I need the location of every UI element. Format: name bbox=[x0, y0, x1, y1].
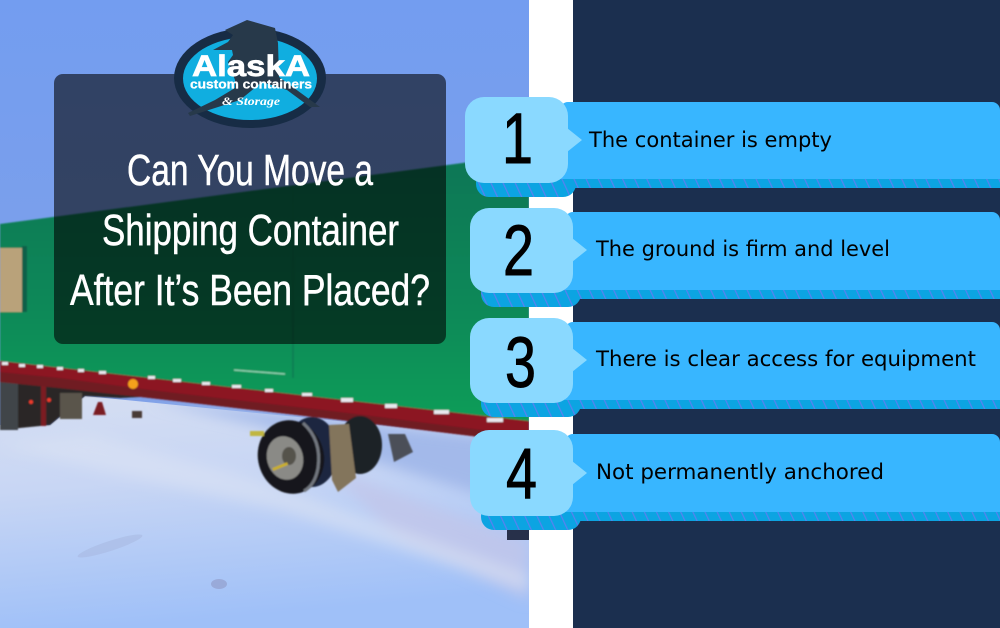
snow ground bbox=[0, 396, 529, 628]
item 3 bbox=[470, 318, 1000, 417]
title: After It’s Been Placed? bbox=[70, 266, 430, 315]
rear dual wheels bbox=[338, 416, 382, 474]
item 2: 2 bbox=[503, 212, 534, 291]
item 4: Not permanently anchored bbox=[596, 460, 884, 484]
red trailer rail bbox=[0, 361, 529, 443]
item 1 bbox=[465, 97, 1000, 197]
item 1: 1 bbox=[502, 100, 533, 179]
item 2: The ground is firm and level bbox=[595, 237, 890, 261]
container door lines bbox=[292, 186, 294, 378]
logo: Alaska Custom Containers & Storage: AlaskA bbox=[192, 50, 310, 83]
item 4 bbox=[470, 430, 1000, 530]
mudflaps bbox=[329, 424, 356, 492]
lights bbox=[128, 379, 138, 389]
front wheel bbox=[250, 413, 332, 501]
snow marks bbox=[76, 531, 144, 561]
white vertical band bbox=[529, 0, 573, 628]
item 4: 4 bbox=[506, 435, 537, 514]
title: Can You Move a bbox=[127, 146, 373, 195]
logo: Alaska Custom Containers & Storage: custom containers bbox=[190, 78, 312, 92]
item 3: There is clear access for equipment bbox=[595, 347, 976, 371]
panel: photo of shipping container on trailer bbox=[0, 0, 529, 628]
title overlay panel bbox=[54, 74, 446, 344]
trailer underside bbox=[0, 372, 240, 430]
logo: Alaska Custom Containers & Storage bbox=[174, 20, 326, 128]
title: Shipping Container bbox=[102, 206, 399, 255]
item 1: The container is empty bbox=[588, 128, 832, 152]
item 2 bbox=[470, 208, 1000, 307]
title bbox=[70, 146, 430, 315]
logo: Alaska Custom Containers & Storage: & Storage bbox=[222, 94, 281, 108]
green container bbox=[0, 160, 529, 422]
trailer markers bbox=[2, 362, 503, 422]
plywood window bbox=[22, 246, 27, 312]
item 3: 3 bbox=[505, 324, 536, 403]
navy background panel bbox=[573, 0, 1000, 628]
